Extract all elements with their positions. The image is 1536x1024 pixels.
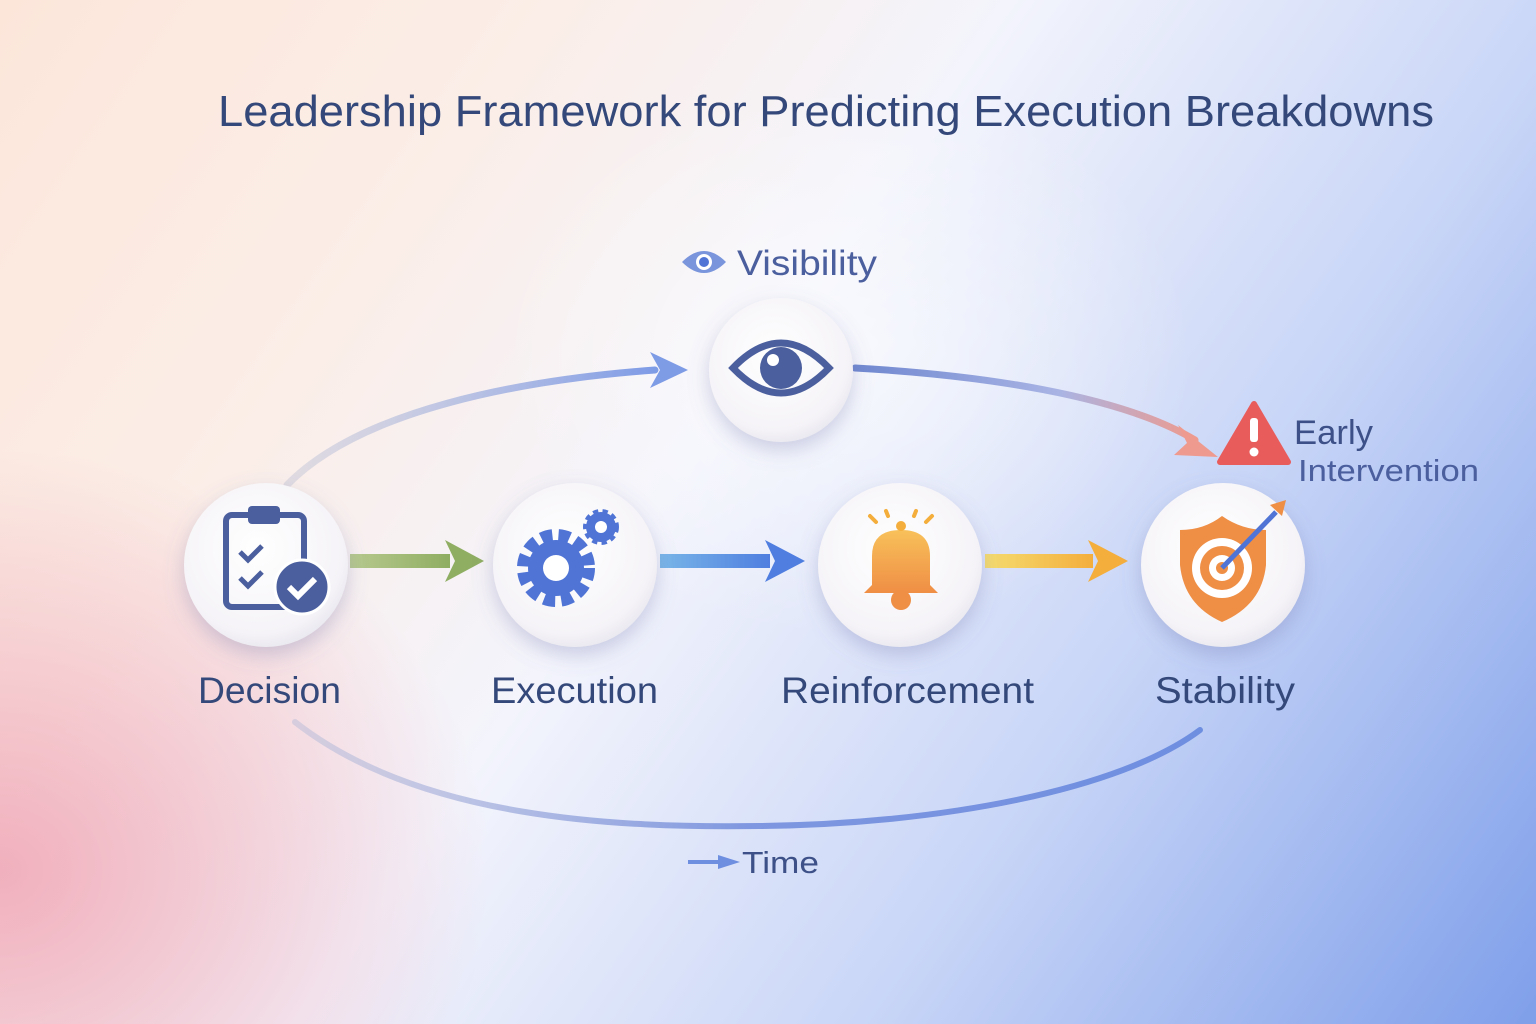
label: early intervention with warning icon [1220,404,1479,488]
arrow: top loop to visibility [287,352,688,485]
arrow: reinforcement to stability [985,540,1128,582]
node: reinforcement [818,483,982,647]
node: visibility eye [709,298,853,442]
arrow: execution to reinforcement [660,540,805,582]
arrow: decision to execution [350,540,484,582]
node: decision [184,483,348,647]
labels: stage names [198,670,1296,711]
title: Leadership Framework for Predicting Execution Breakdowns [218,87,1434,136]
labels: stage names: Reinforcement [781,670,1035,711]
arrow: visibility to early intervention [855,368,1218,457]
labels: stage names: Execution [491,670,658,711]
label: visibility with eye icon: Visibility [737,244,878,283]
node: execution [493,483,657,647]
labels: stage names: Stability [1155,670,1296,711]
icon: eye [733,343,829,393]
label: early intervention with warning icon: Intervention [1298,453,1479,488]
node: stability [1141,483,1305,647]
icon: gears [524,512,616,600]
arrow: bottom time loop [295,722,1200,826]
label: time [688,845,819,880]
icon: clipboard [226,506,329,614]
label: early intervention with warning icon: Early [1294,414,1373,452]
label: time: Time [742,845,819,880]
label: visibility with eye icon [682,244,878,283]
icon: shield target [1180,500,1286,622]
labels: stage names: Decision [198,670,341,711]
icon: bell [864,511,938,610]
